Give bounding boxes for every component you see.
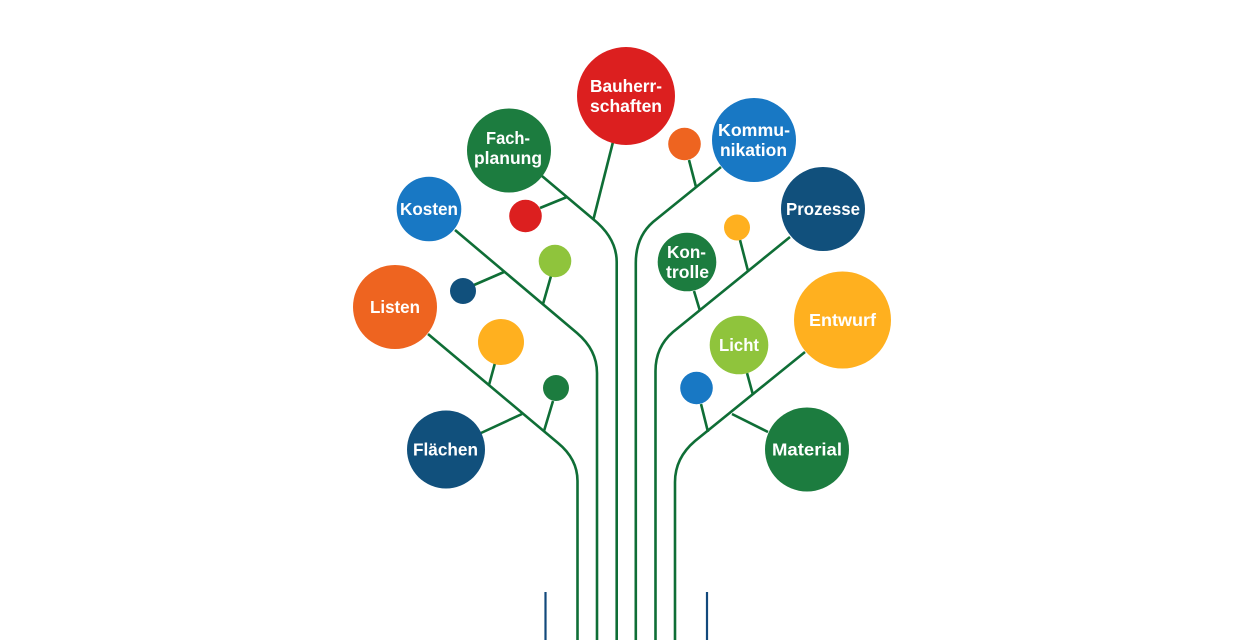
node: Material: [765, 408, 849, 492]
node: Kommunikation: [712, 98, 796, 182]
node: Bauherrschaften: schaften: [590, 96, 662, 116]
right navy base line: [706, 592, 708, 640]
node: Fachplanung: [467, 108, 551, 192]
node: Entwurf: [794, 272, 891, 368]
branch: Fachplanung and Bauherrschaften: [540, 142, 617, 640]
node: Entwurf: Entwurf: [809, 310, 876, 330]
node: Prozesse: [781, 167, 865, 251]
node: Licht: [710, 316, 768, 374]
branch: Entwurf and Material: [675, 352, 805, 640]
node: Fachplanung: planung: [474, 148, 542, 168]
node: Kommunikation: nikation: [720, 140, 787, 160]
node: Fachplanung: Fach-: [486, 128, 530, 148]
small dot: lime: [539, 245, 571, 277]
node: Listen: Listen: [370, 297, 420, 317]
branch: Kosten: [455, 230, 597, 640]
small dot: blue: [680, 372, 713, 404]
node: Kosten: [397, 177, 461, 241]
node: Bauherrschaften: Bauherr-: [590, 76, 662, 96]
small dot: yellow: [478, 319, 524, 365]
node: Kontrolle: Kon-: [667, 242, 706, 262]
node: Licht: Licht: [719, 335, 759, 355]
small dot: orange: [668, 128, 701, 160]
node: Material: Material: [772, 440, 842, 460]
node: Prozesse: Prozesse: [786, 199, 860, 219]
branch: Listen and Flächen: [428, 334, 578, 640]
node: Flächen: Flächen: [413, 440, 478, 460]
node: Kontrolle: [658, 233, 716, 291]
node: Listen: [353, 265, 437, 349]
branch: Prozesse: [656, 237, 790, 640]
small dot: green: [543, 375, 569, 401]
node: Kosten: Kosten: [400, 199, 458, 219]
small dot: red: [509, 200, 542, 232]
left navy base line: [544, 592, 547, 640]
node: Flächen: [407, 410, 485, 488]
node: Bauherrschaften: [577, 47, 675, 145]
branch: Kommunikation: [636, 160, 721, 640]
node: Kontrolle: trolle: [666, 262, 709, 282]
small dot: navy: [450, 278, 476, 304]
node: Kommunikation: Kommu-: [718, 120, 790, 140]
small dot: yellow right: [724, 214, 750, 240]
